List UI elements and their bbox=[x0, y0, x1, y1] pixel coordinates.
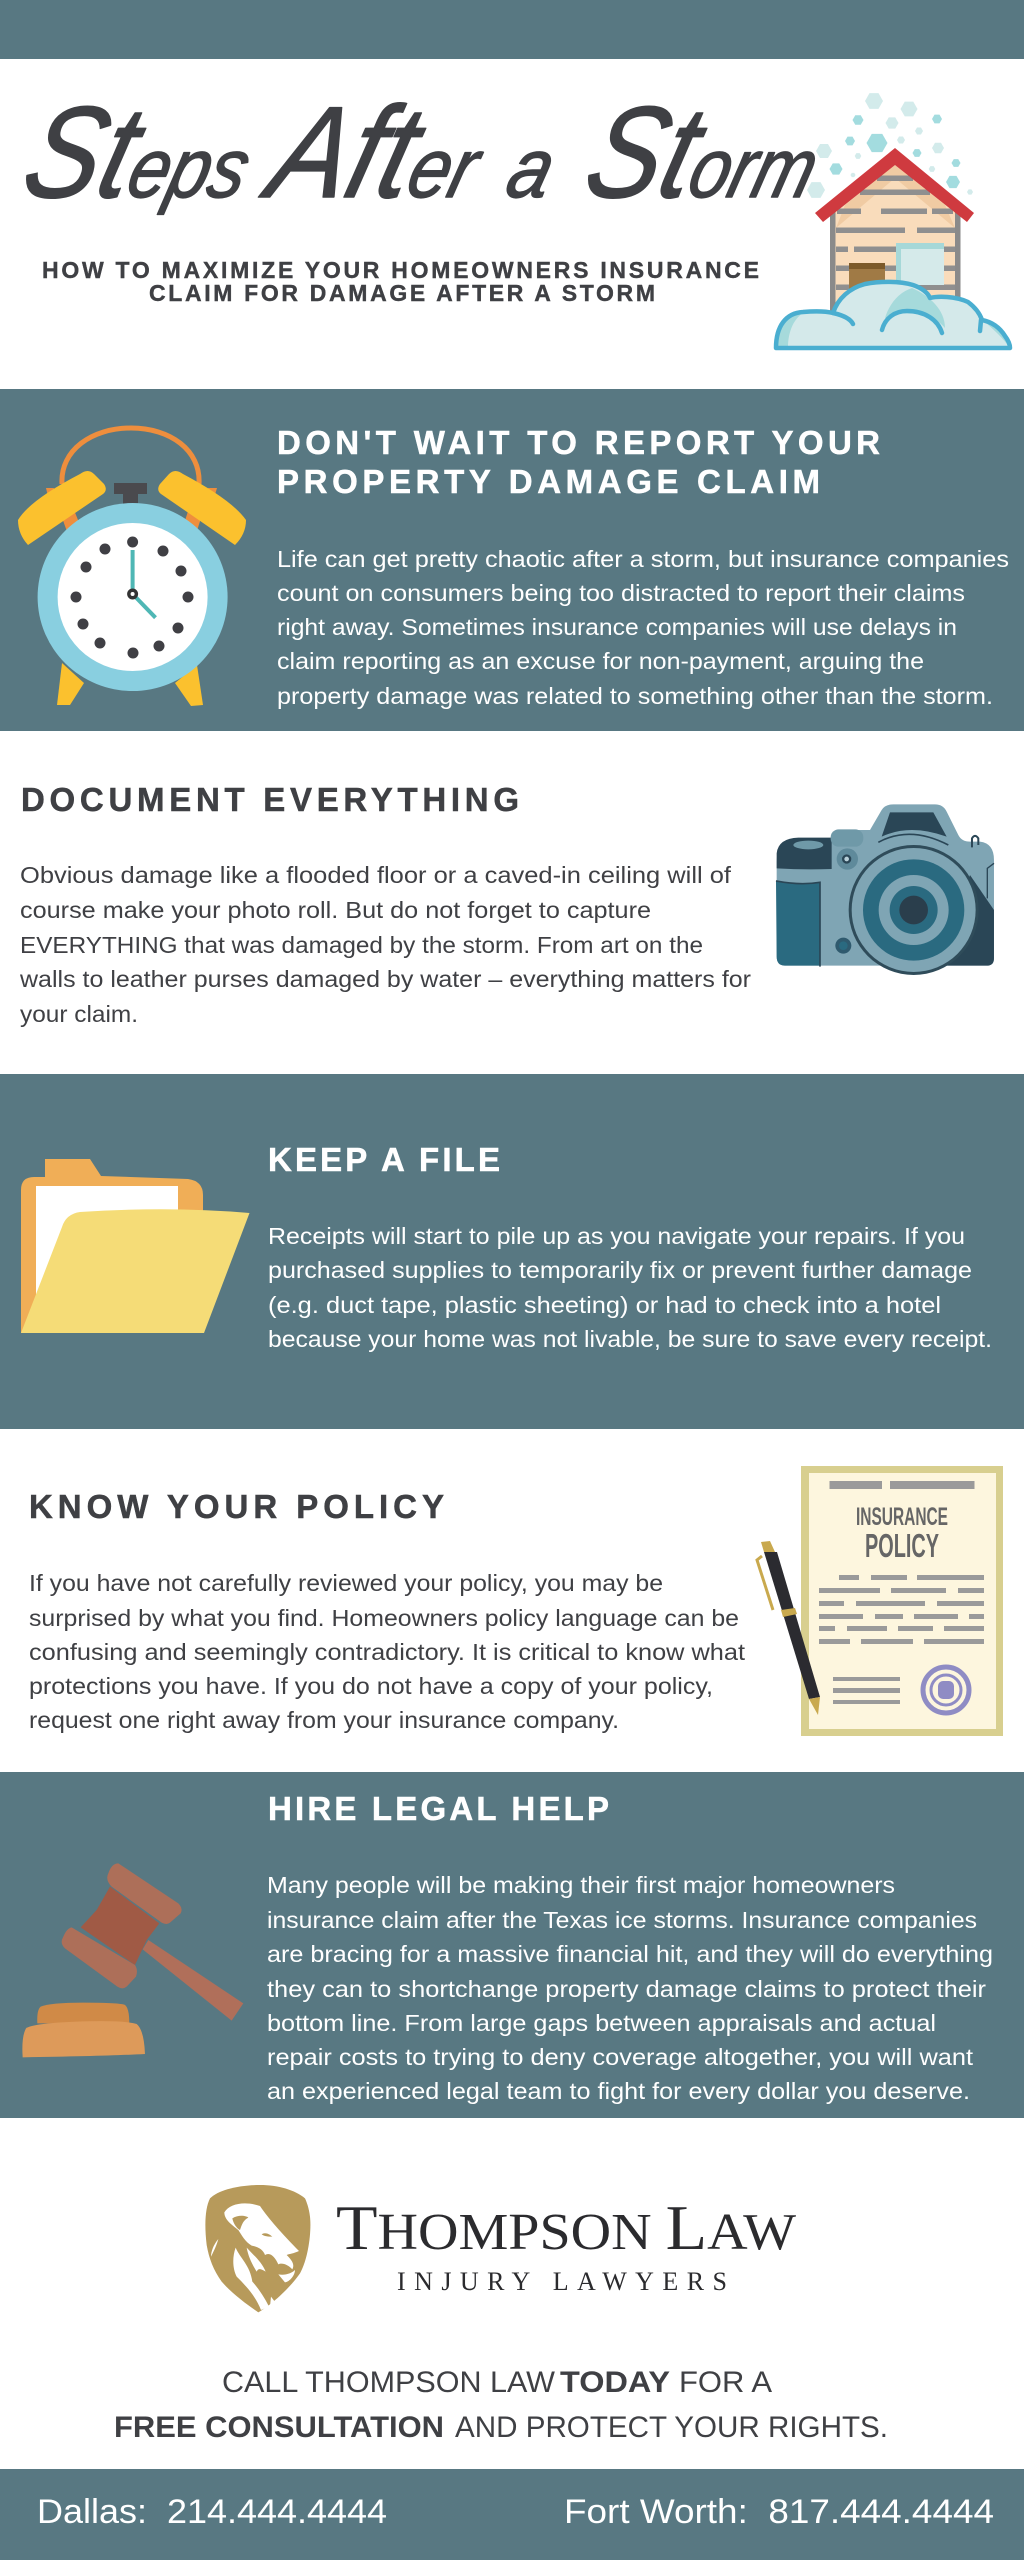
text block: surprised by what you find. Homeowners policy language can be bbox=[29, 1605, 739, 1631]
text block bbox=[277, 546, 1009, 709]
icon: snowy house bbox=[776, 93, 1010, 348]
text block: (e.g. duct tape, plastic sheeting) or had to check into a hotel bbox=[268, 1292, 941, 1318]
heading: KNOW YOUR POLICY bbox=[29, 1488, 444, 1525]
text block: claim reporting as an excuse for non-payment, arguing the bbox=[277, 648, 924, 674]
title bbox=[10, 80, 839, 225]
panel: don't wait to report bbox=[0, 389, 1024, 731]
icon: insurance policy document: INSURANCE bbox=[856, 1503, 948, 1531]
call to action: CALL THOMPSON LAW bbox=[222, 2366, 556, 2399]
text block: an experienced legal team to fight for every dollar you deserve. bbox=[267, 2078, 970, 2104]
subtitle: CLAIM FOR DAMAGE AFTER A STORM bbox=[149, 280, 655, 306]
heading: HIRE LEGAL HELP bbox=[268, 1790, 609, 1827]
logo bbox=[205, 2185, 796, 2312]
heading: PROPERTY DAMAGE CLAIM bbox=[277, 463, 820, 500]
icon: alarm clock bbox=[18, 428, 246, 706]
call to action: TODAY bbox=[560, 2366, 670, 2399]
text block: are bracing for a massive financial hit, and they will do everything bbox=[267, 1941, 993, 1967]
text block: insurance claim after the Texas ice storms. Insurance companies bbox=[267, 1907, 977, 1933]
text block: Life can get pretty chaotic after a storm, but insurance companies bbox=[277, 546, 1009, 572]
text block bbox=[19, 862, 751, 1027]
call to action: FOR A bbox=[679, 2366, 772, 2399]
text block: property damage was related to something other than the storm. bbox=[277, 683, 993, 709]
text block bbox=[267, 1872, 993, 2104]
text block: count on consumers being too distracted to report their claims bbox=[277, 580, 965, 606]
subtitle: HOW TO MAXIMIZE YOUR HOMEOWNERS INSURANCE bbox=[42, 257, 759, 283]
text block: EVERYTHING that was damaged by the storm. From art on the bbox=[20, 932, 703, 958]
icon: insurance policy document: POLICY bbox=[865, 1527, 939, 1564]
text block: Receipts will start to pile up as you navigate your repairs. If you bbox=[268, 1223, 965, 1249]
panel: hire legal help bbox=[0, 1772, 1024, 2118]
text block: If you have not carefully reviewed your policy, you may be bbox=[29, 1570, 663, 1596]
text block: request one right away from your insurance company. bbox=[29, 1707, 619, 1733]
text block: course make your photo roll. But do not forget to capture bbox=[20, 897, 651, 923]
icon: gavel bbox=[22, 1863, 243, 2057]
call to action: AND PROTECT YOUR RIGHTS. bbox=[455, 2411, 888, 2444]
title: After bbox=[250, 80, 503, 225]
icon: lion shield bbox=[205, 2185, 310, 2312]
panel: contact bar bbox=[0, 2469, 1024, 2560]
phone: Dallas: Dallas: 214.444.4444 bbox=[37, 2493, 387, 2531]
call to action bbox=[114, 2366, 888, 2444]
panel: keep a file bbox=[0, 1074, 1024, 1429]
text block: bottom line. From large gaps between appraisals and actual bbox=[267, 2010, 936, 2036]
text block: protections you have. If you do not have a copy of your policy, bbox=[29, 1673, 713, 1699]
text block: purchased supplies to temporarily fix or prevent further damage bbox=[268, 1257, 972, 1283]
tagline: INJURY LAWYERS bbox=[397, 2267, 727, 2296]
text block bbox=[268, 1223, 992, 1352]
call to action: FREE CONSULTATION bbox=[114, 2411, 444, 2444]
icon: insurance policy document bbox=[757, 1466, 1003, 1736]
text block: confusing and seemingly contradictory. It is critical to know what bbox=[29, 1639, 746, 1665]
text block: repair costs to trying to deny coverage altogether, you will want bbox=[267, 2044, 974, 2070]
panel: footer logo and call to action bbox=[114, 2185, 888, 2444]
text block: walls to leather purses damaged by water – everything matters for bbox=[19, 966, 751, 992]
heading: DON'T WAIT TO REPORT YOUR bbox=[277, 424, 880, 461]
heading bbox=[277, 424, 880, 500]
panel: document everything bbox=[19, 781, 994, 1027]
panel: know your policy bbox=[29, 1466, 1003, 1736]
subtitle bbox=[42, 257, 759, 306]
text block: Many people will be making their first major homeowners bbox=[267, 1872, 895, 1898]
text block: because your home was not livable, be sure to save every receipt. bbox=[268, 1326, 992, 1352]
icon: folder bbox=[21, 1159, 250, 1333]
heading: DOCUMENT EVERYTHING bbox=[21, 781, 519, 818]
title: Steps bbox=[10, 80, 271, 225]
title: Storm bbox=[572, 80, 839, 225]
phone: Fort Worth: Fort Worth: 817.444.4444 bbox=[564, 2493, 994, 2531]
heading: KEEP A FILE bbox=[268, 1141, 500, 1178]
company name: THOMPSON LAW bbox=[336, 2193, 796, 2263]
text block: Obvious damage like a flooded floor or a caved-in ceiling will of bbox=[20, 862, 732, 888]
text block: your claim. bbox=[20, 1001, 138, 1027]
text block: they can to shortchange property damage claims to protect their bbox=[267, 1976, 986, 2002]
icon: camera bbox=[776, 804, 994, 975]
top band bbox=[0, 0, 1024, 59]
text block: right away. Sometimes insurance companies will use delays in bbox=[277, 614, 957, 640]
title: a bbox=[498, 122, 565, 216]
text block bbox=[29, 1570, 746, 1733]
panel: header bbox=[10, 80, 1010, 348]
